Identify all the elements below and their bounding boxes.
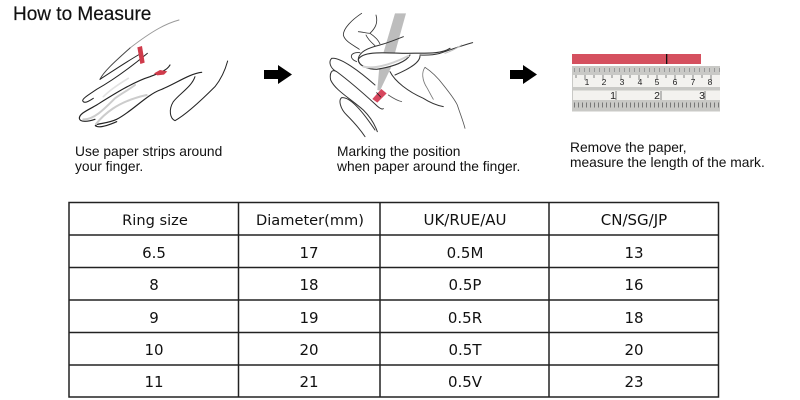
row: size 9	[149, 309, 644, 327]
table header: Diameter(mm)	[256, 212, 364, 229]
row: size 10: 0.5T	[448, 341, 482, 359]
row: size 11: 23	[624, 373, 644, 391]
row: size 11	[144, 373, 644, 391]
row: size 6.5	[142, 244, 644, 262]
row: size 6.5: 13	[624, 244, 644, 262]
icon: hand marking the strip with a pencil	[330, 13, 473, 137]
ruler numbers: 7	[691, 77, 696, 87]
arrow: step 1 to step 2	[264, 65, 292, 84]
red paper strip on middle finger	[154, 70, 167, 75]
table grid	[69, 202, 718, 397]
row: size 8	[149, 276, 644, 294]
thumb	[358, 48, 450, 69]
ruler numbers: 2	[602, 77, 607, 87]
ruler numbers: 5	[655, 77, 660, 87]
ruler	[572, 66, 720, 112]
icon: hand with paper strips around finger	[79, 20, 228, 127]
row: size 10	[144, 341, 644, 359]
icon: paper strip above ruler: 2	[654, 90, 660, 102]
icon: paper strip above ruler: 1	[610, 90, 616, 102]
ruler numbers: 3	[620, 77, 625, 87]
caption: step 2 second line: when paper around the finger.	[336, 159, 520, 174]
table header: CN/SG/JP	[601, 211, 667, 229]
icon: paper strip above ruler: 3	[699, 90, 705, 102]
row: size 9: 9	[149, 309, 159, 327]
row: size 10: 10	[144, 341, 164, 359]
row: size 11: 21	[299, 373, 319, 391]
caption: step 1 second line: your finger.	[75, 159, 143, 174]
row: size 9: 18	[624, 309, 644, 327]
arrow: step 2 to step 3	[510, 65, 537, 84]
table: ring size chart	[69, 202, 718, 397]
red paper strip	[572, 54, 701, 64]
ruler numbers: 1	[585, 77, 590, 87]
row: size 6.5: 6.5	[142, 244, 166, 262]
caption: step 3: Remove the paper,	[570, 140, 687, 155]
row: size 11: 0.5V	[448, 373, 483, 391]
row: size 8: 8	[149, 276, 159, 294]
row: size 6.5: 17	[299, 244, 319, 262]
ruler numbers: 6	[673, 77, 678, 87]
row: size 11: 11	[144, 373, 164, 391]
row: size 10: 20	[299, 341, 319, 359]
row: size 8: 0.5P	[449, 276, 481, 294]
row: size 8: 18	[299, 276, 319, 294]
pencil	[377, 13, 406, 91]
row: size 6.5: 0.5M	[447, 244, 483, 262]
table header: UK/RUE/AU	[423, 211, 507, 229]
row: size 9: 0.5R	[448, 309, 482, 327]
row: size 8: 16	[624, 276, 644, 294]
row: size 9: 19	[299, 309, 319, 327]
ruler numbers: 4	[638, 77, 643, 87]
table header	[122, 211, 667, 229]
icon: paper strip above ruler	[572, 54, 720, 112]
caption: step 3 second line: measure the length of the mark.	[570, 155, 765, 170]
title: How to Measure	[13, 4, 151, 25]
row: size 10: 20	[624, 341, 644, 359]
caption: step 1: Use paper strips around	[75, 144, 222, 159]
caption: step 2: Marking the position	[337, 144, 460, 159]
ruler numbers: 8	[708, 77, 713, 87]
table header: Ring size	[122, 212, 188, 229]
red paper strip on ring finger	[137, 46, 145, 64]
red paper strip with pencil mark	[372, 89, 387, 103]
